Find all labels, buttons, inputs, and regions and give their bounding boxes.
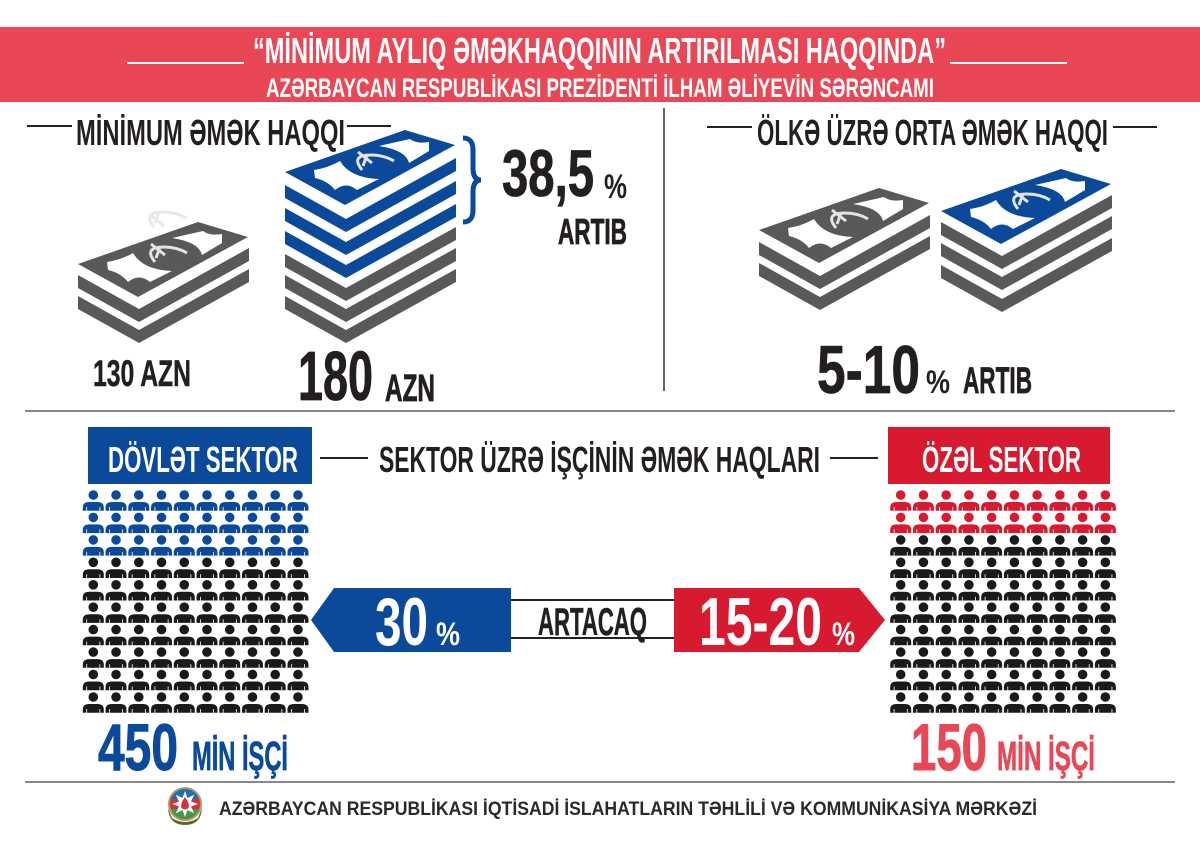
icon: blue-top money stack (941, 169, 1112, 312)
stat: 38,5% artib: ARTIB (558, 211, 627, 252)
stat: 38,5% artib (502, 136, 627, 252)
divider (25, 781, 1175, 783)
icon: large money stack 180 AZN (285, 130, 456, 343)
people grid: public sector (83, 490, 308, 713)
arrow: private sector 15-20%: % (832, 616, 855, 652)
label: 180 AZN: AZN (385, 368, 435, 410)
stat: 150 min isci (911, 710, 1095, 784)
arrow: public sector 30% (311, 584, 511, 660)
title banner: AZƏRBAYCAN RESPUBLİKASI PREZİDENTİ İLHAM ƏLİYEVİN SƏRƏNCAMI (266, 73, 934, 103)
label: 180 AZN: 180 (298, 337, 373, 415)
icon: grey money stack (759, 188, 930, 310)
stat: 150 min isci: MİN İŞÇİ (997, 733, 1095, 779)
stat: 5-10% artib: % (926, 364, 950, 400)
label: artacaq: ARTACAQ (538, 601, 647, 644)
label: private sector: ÖZƏL SEKTOR (922, 439, 1081, 480)
vertical divider (663, 108, 665, 391)
divider (25, 410, 1175, 412)
title banner (0, 27, 1200, 103)
stat: 450 min isci (98, 710, 288, 784)
arrow: public sector 30%: % (436, 616, 460, 652)
people grid: private sector (890, 490, 1116, 713)
heading: minimum wage: MİNİMUM ƏMƏK HAQQI (76, 112, 345, 153)
arrow: private sector 15-20%: 15-20 (699, 584, 822, 660)
stat: 450 min isci: 450 (98, 710, 178, 784)
stat: 5-10% artib: 5-10 (817, 332, 920, 408)
heading: sector wages: SEKTOR ÜZRƏ İŞÇİNİN ƏMƏK HAQLARI (379, 439, 820, 480)
stat: 38,5% artib: 38,5 (502, 136, 594, 210)
stat: 5-10% artib: ARTIB (963, 360, 1032, 401)
icon: emblem of Azerbaijan (168, 787, 202, 825)
stat: 450 min isci: MİN İŞÇİ (192, 733, 288, 779)
footer text: AZƏRBAYCAN RESPUBLİKASI İQTİSADİ İSLAHATLARIN TƏHLİLİ VƏ KOMMUNİKASİYA MƏRKƏZİ (219, 799, 1037, 820)
stat: 150 min isci: 150 (911, 710, 987, 784)
icon: brace (463, 138, 481, 222)
label: public sector (88, 427, 312, 484)
label: public sector: DÖVLƏT SEKTOR (108, 439, 298, 480)
arrow: public sector 30%: 30 (375, 584, 428, 660)
stat: 38,5% artib: % (604, 168, 627, 206)
label: 130 AZN: 130 AZN (93, 353, 191, 394)
icon: small money stack 130 AZN (78, 212, 249, 343)
label: private sector (888, 427, 1110, 484)
stat: 5-10% artib (817, 332, 1032, 408)
